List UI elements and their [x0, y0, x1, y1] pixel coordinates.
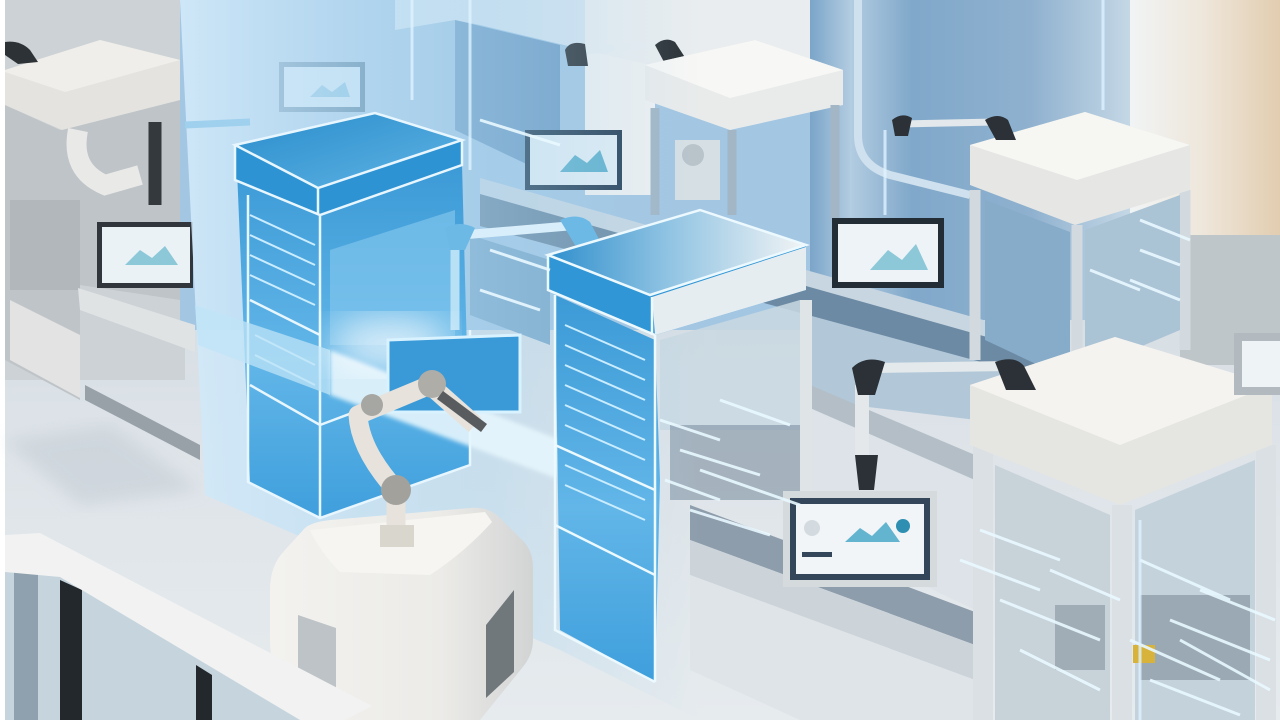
outlines: [548, 210, 806, 682]
white robot inside: [77, 130, 140, 185]
glass panel: [5, 572, 310, 720]
white top box: [645, 40, 843, 130]
back white box: [395, 0, 585, 50]
top box: [235, 113, 462, 215]
hologram machine: left: [235, 113, 470, 518]
left margin strip: [0, 0, 5, 720]
hologram machine: right: [548, 210, 806, 682]
hologram arm left: [185, 122, 250, 125]
dark arm: [572, 44, 660, 52]
monitor: left machine: [97, 222, 193, 288]
right window: [486, 590, 514, 698]
mechanism: [1140, 595, 1250, 680]
warm lit top right corner: [1130, 0, 1280, 240]
lower white cabinet: [10, 300, 80, 398]
machine top box: [5, 40, 180, 130]
right machine lower: [852, 337, 1272, 720]
dark column: [148, 122, 162, 205]
interior: [995, 465, 1110, 720]
inner machinery: [675, 140, 720, 200]
hologram glass sheet: [180, 0, 700, 720]
monitor: front large: [783, 491, 937, 587]
outlines: [235, 113, 470, 518]
top box: [548, 210, 806, 335]
slat lines: [250, 215, 315, 385]
machine cabinet body: [5, 100, 180, 400]
floor between lines: [810, 390, 975, 610]
right lower wall: [1180, 235, 1280, 365]
legs: [983, 445, 1266, 720]
base top: [310, 512, 492, 575]
arm: [900, 122, 995, 124]
back area behind hologram: [180, 0, 820, 330]
interior: [985, 200, 1070, 380]
right machine upper: [892, 112, 1190, 395]
slat lines: [565, 325, 645, 520]
robot cell base: [270, 508, 533, 720]
machine frame lower middle: [660, 300, 806, 500]
white column: [585, 45, 655, 195]
white handrail: [5, 533, 372, 720]
back wall left: [5, 0, 185, 380]
top box: [970, 337, 1272, 505]
top box: [970, 112, 1190, 225]
steel tank wall: [810, 0, 1150, 320]
glowing conveyor centre: [330, 350, 560, 478]
back machine upper centre: [395, 0, 843, 220]
robot arm: [358, 370, 484, 547]
legs: [975, 190, 1185, 395]
dark posts: [60, 580, 82, 720]
opening: [330, 210, 455, 345]
monitor: far right edge: [1234, 333, 1280, 395]
monitor: upper back: [279, 62, 365, 112]
conveyor: lower front line: [690, 505, 975, 645]
dark arm joint: [5, 42, 38, 64]
left window: [298, 615, 336, 692]
hologram arm right: [445, 216, 602, 330]
left machine conveyor: [78, 288, 195, 352]
machinery below upper line: [810, 280, 1060, 430]
conveyor: mid rail: [810, 385, 975, 480]
legs: [655, 105, 835, 220]
light post: [14, 572, 38, 720]
machinery under hologram back: [470, 235, 550, 345]
curved pipe on tank: [858, 0, 970, 195]
glow burst on conveyor: [330, 317, 450, 373]
arm: [875, 366, 1010, 368]
body: [237, 165, 470, 518]
monitor: middle right: [832, 218, 944, 288]
dark window area: [455, 20, 560, 180]
left conveyor hologram: [195, 305, 330, 395]
body: [555, 295, 660, 682]
hologram tablet: [388, 335, 520, 412]
monitor: upper centre: [525, 130, 622, 190]
left back machine: [5, 40, 200, 505]
yellow stop button: [1133, 645, 1155, 663]
floor shadow: [5, 425, 200, 505]
conveyor: upper back line: [480, 192, 1040, 378]
vertical light beams: [412, 0, 1140, 720]
foreground railing: [5, 533, 372, 720]
lower panels: [10, 200, 80, 290]
digital scan lines: [480, 120, 1275, 715]
